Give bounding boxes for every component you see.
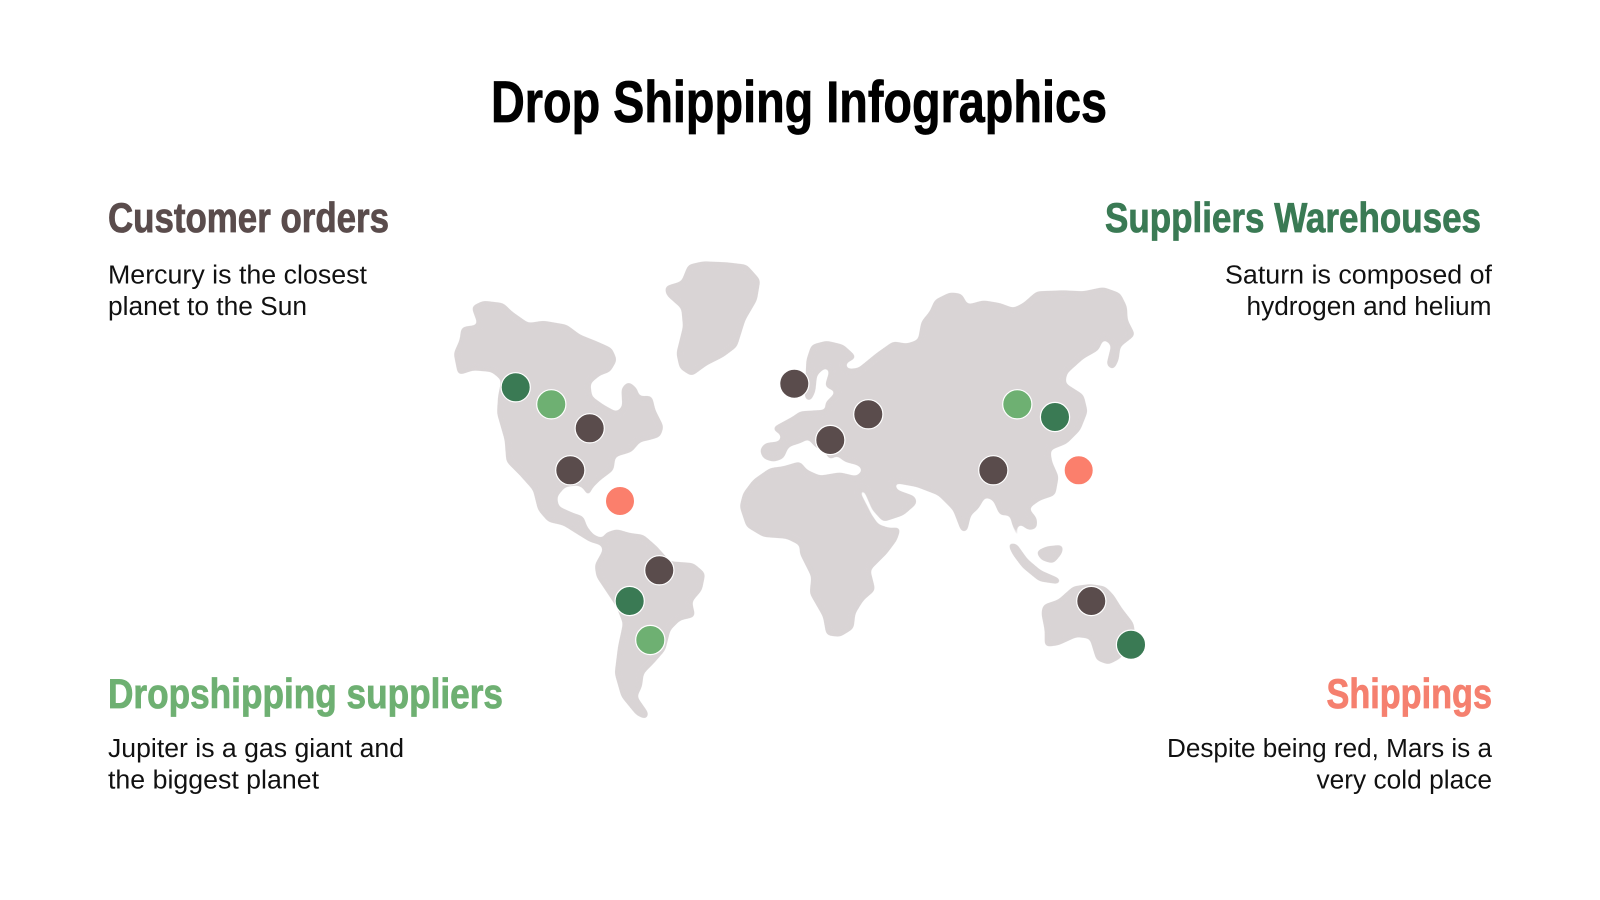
marker: South America light green bbox=[636, 625, 665, 655]
heading: suppliers warehouses: Suppliers Warehouses bbox=[1105, 194, 1481, 241]
text block: suppliers warehouses bbox=[1225, 262, 1493, 321]
text block: dropshipping suppliers bbox=[108, 735, 404, 794]
text block: shippings bbox=[1167, 735, 1493, 794]
marker: South China dark bbox=[979, 456, 1008, 485]
panel: dropshipping suppliers bbox=[108, 670, 503, 794]
title: Drop Shipping Infographics bbox=[491, 70, 1107, 135]
marker: China light green bbox=[1003, 390, 1032, 419]
marker: North America dark bbox=[575, 414, 604, 443]
marker: South America dark bbox=[645, 556, 674, 585]
marker: Southern Europe dark bbox=[816, 425, 845, 455]
text block: customer orders: planet to the Sun bbox=[108, 293, 307, 321]
text block: suppliers warehouses: Saturn is composed of bbox=[1225, 262, 1493, 290]
marker: Caribbean coral bbox=[605, 486, 635, 516]
text block: customer orders: Mercury is the closest bbox=[108, 262, 367, 290]
text block: suppliers warehouses: hydrogen and helium bbox=[1246, 293, 1492, 321]
marker: North America dark green bbox=[501, 373, 530, 402]
land: Australia bbox=[1042, 584, 1135, 664]
marker: North America light green bbox=[537, 390, 566, 419]
text block: shippings: Despite being red, Mars is a bbox=[1167, 735, 1493, 763]
world map bbox=[454, 262, 1146, 719]
map landmasses bbox=[454, 262, 1135, 719]
marker: East Asia coral bbox=[1064, 456, 1093, 485]
land: the Americas bbox=[454, 301, 705, 719]
land: Borneo bbox=[1036, 545, 1063, 563]
marker: Australia dark bbox=[1077, 586, 1106, 616]
map markers bbox=[501, 369, 1146, 659]
text block: shippings: very cold place bbox=[1316, 766, 1492, 794]
land: Greenland bbox=[665, 262, 760, 376]
heading: customer orders: Customer orders bbox=[108, 194, 389, 241]
heading: shippings: Shippings bbox=[1326, 670, 1492, 717]
marker: Central America dark bbox=[556, 456, 585, 485]
marker: UK dark bbox=[780, 369, 809, 398]
marker: Australia dark green bbox=[1116, 630, 1146, 659]
text block: dropshipping suppliers: Jupiter is a gas giant and bbox=[108, 735, 404, 763]
land: Sumatra and Java bbox=[1008, 543, 1061, 584]
marker: Korea dark green bbox=[1040, 402, 1070, 432]
land: Eurasia and Africa bbox=[740, 287, 1135, 637]
panel: customer orders bbox=[108, 194, 389, 321]
marker: South America dark green bbox=[615, 586, 644, 616]
text block: customer orders bbox=[108, 262, 367, 321]
panel: shippings bbox=[1167, 670, 1493, 794]
marker: Eastern Europe dark bbox=[854, 400, 883, 429]
panel: suppliers warehouses bbox=[1105, 194, 1493, 321]
text block: dropshipping suppliers: the biggest planet bbox=[108, 766, 319, 794]
heading: dropshipping suppliers: Dropshipping suppliers bbox=[108, 670, 503, 717]
